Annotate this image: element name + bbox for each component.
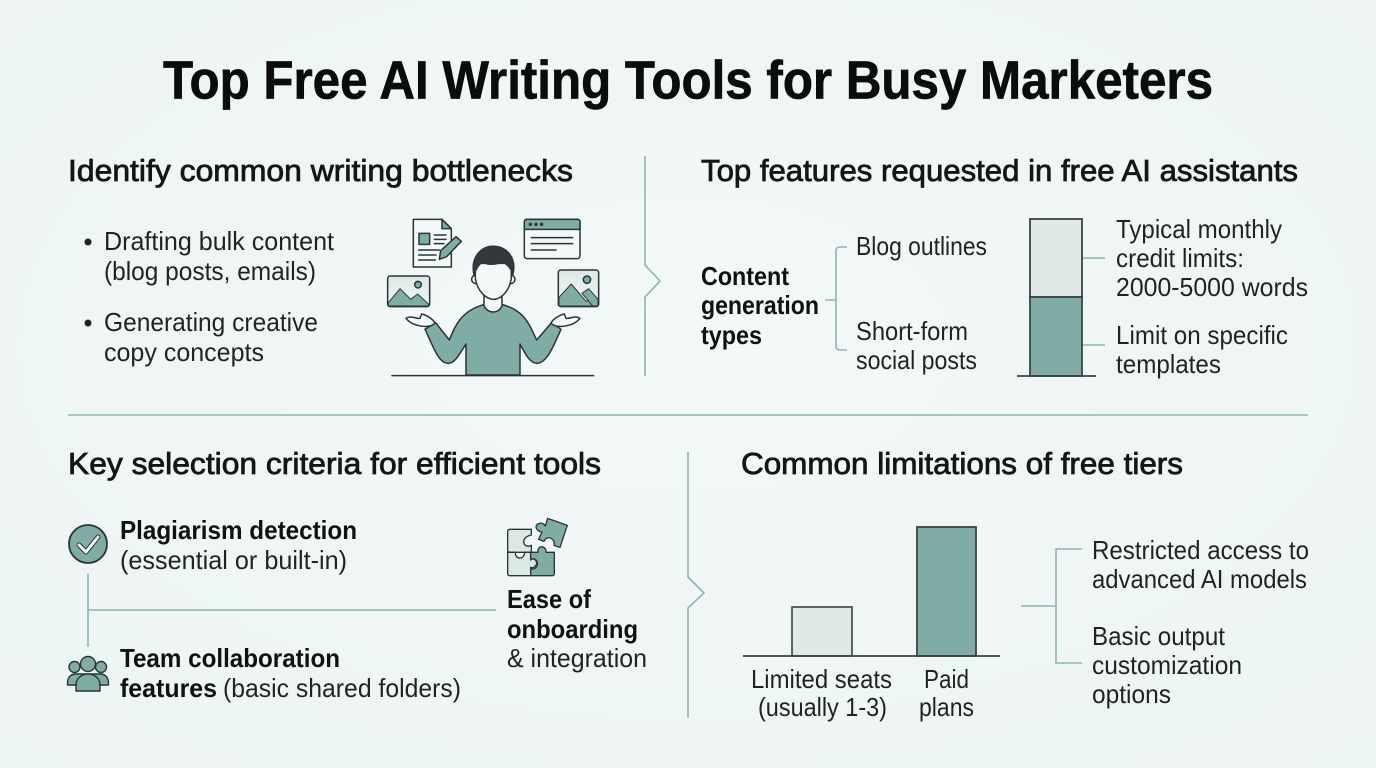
bar chart: plans	[919, 692, 974, 722]
team collaboration text	[120, 643, 461, 703]
criteria connector	[88, 574, 496, 647]
content types list: Short-form	[856, 316, 968, 346]
bar chart: Limited seats	[751, 664, 892, 694]
divider arrow: bottom	[688, 452, 704, 718]
icon: overwhelmed marketer with documents	[388, 219, 599, 376]
bullet list: Drafting bulk content	[104, 226, 335, 256]
heading: limitations: Common limitations of free tiers	[741, 446, 1183, 481]
ease of onboarding text	[507, 584, 647, 673]
credit limit notes: Limit on specific	[1116, 320, 1288, 350]
limitations connector	[1021, 549, 1082, 663]
icon: browser window	[524, 219, 580, 259]
horizontal divider	[68, 414, 1308, 416]
credit limit notes: templates	[1116, 349, 1221, 379]
panel: writing bottlenecks	[68, 153, 599, 376]
bar chart: Paid	[924, 664, 969, 694]
ease of onboarding text: & integration	[507, 643, 647, 673]
bullet list	[84, 226, 335, 367]
limitations list: advanced AI models	[1092, 564, 1307, 594]
content types list: Blog outlines	[856, 231, 987, 261]
plagiarism text	[120, 515, 357, 575]
content generation label	[701, 261, 819, 350]
title: Top Free AI Writing Tools for Busy Marketers	[163, 50, 1213, 110]
icon: check badge	[69, 525, 107, 563]
credit limit notes: credit limits:	[1116, 243, 1244, 273]
content generation label: Content	[701, 261, 789, 291]
heading: criteria: Key selection criteria for efficient tools	[68, 446, 601, 481]
credit limit notes: 2000-5000 words	[1116, 272, 1308, 302]
content generation label: generation	[701, 290, 819, 320]
content generation label: types	[701, 320, 762, 350]
ease of onboarding text: onboarding	[507, 614, 638, 644]
team collaboration text: features	[120, 673, 217, 703]
divider arrow: top	[645, 156, 660, 376]
content types list: social posts	[856, 345, 977, 375]
plagiarism text: Plagiarism detection	[120, 515, 357, 545]
limitations list	[1092, 535, 1309, 709]
panel: requested features	[701, 153, 1308, 379]
bullet list: (blog posts, emails)	[104, 256, 316, 286]
icon: document with pencil	[413, 219, 461, 267]
heading: bottlenecks: Identify common writing bottlenecks	[68, 153, 573, 188]
credit limit notes	[1116, 214, 1308, 379]
bar chart: (usually 1-3)	[758, 692, 887, 722]
limitations list: Basic output	[1092, 621, 1226, 651]
credit limit notes: Typical monthly	[1116, 214, 1282, 244]
content types list	[856, 231, 987, 375]
team collaboration text: Team collaboration	[120, 643, 340, 673]
limitations list: options	[1092, 679, 1171, 709]
bar chart	[743, 527, 1000, 722]
heading: features: Top features requested in free AI assistants	[701, 153, 1298, 188]
icon: image left	[388, 276, 430, 307]
icon: image right	[558, 270, 599, 307]
limitations list: Restricted access to	[1092, 535, 1309, 565]
stacked bar chart	[1017, 219, 1105, 376]
icon: puzzle	[508, 518, 567, 576]
limitations list: customization	[1092, 650, 1242, 680]
panel: selection criteria	[67, 446, 647, 703]
ease of onboarding text: Ease of	[507, 584, 591, 614]
bullet list: copy concepts	[104, 337, 264, 367]
panel: free tier limitations	[741, 446, 1309, 722]
icon: team	[67, 656, 109, 691]
plagiarism text: (essential or built-in)	[120, 545, 347, 575]
bracket connector	[825, 247, 847, 350]
bullet list: Generating creative	[104, 307, 318, 337]
team collaboration text: (basic shared folders)	[223, 673, 461, 703]
